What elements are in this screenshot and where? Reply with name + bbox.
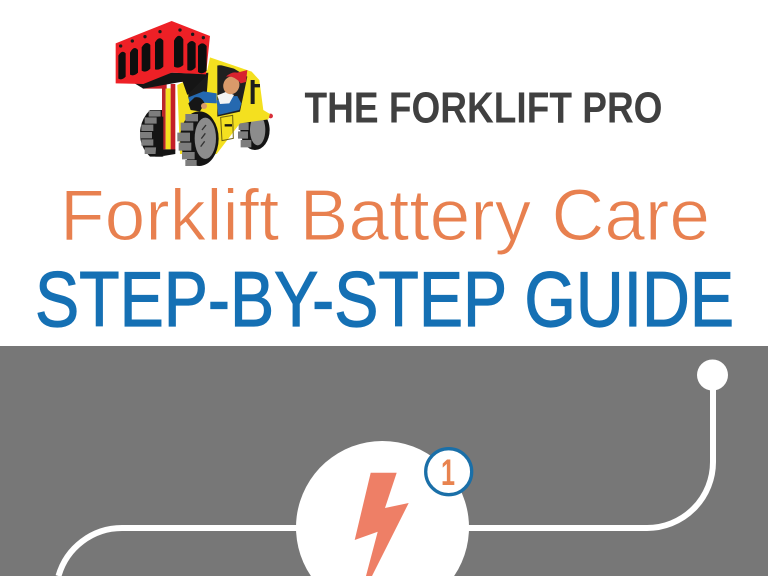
icon: lightning bolt [355, 473, 409, 576]
logo: forklift with driver [116, 21, 273, 166]
icon: middle wheel [140, 110, 175, 157]
icon: cab interior [188, 73, 208, 98]
icon: mast [143, 78, 183, 151]
icon: side mirror post [251, 80, 260, 104]
icon: front wheel [177, 111, 219, 166]
step number badge [426, 449, 472, 495]
step number badge: 1 [441, 452, 455, 493]
heading: brand name: THE FORKLIFT PRO [304, 84, 662, 132]
icon: cab window and driver [188, 65, 247, 117]
start node [697, 360, 728, 390]
panel: grey background [0, 346, 768, 576]
icon: red fork crate [116, 21, 210, 95]
step 1 circle [296, 441, 472, 576]
icon: forklift body [177, 57, 270, 154]
icon: cab door [221, 115, 233, 141]
timeline path [58, 360, 728, 576]
heading: title line one: Forklift Battery Care [60, 175, 710, 256]
icon: rear wheel [238, 110, 273, 150]
